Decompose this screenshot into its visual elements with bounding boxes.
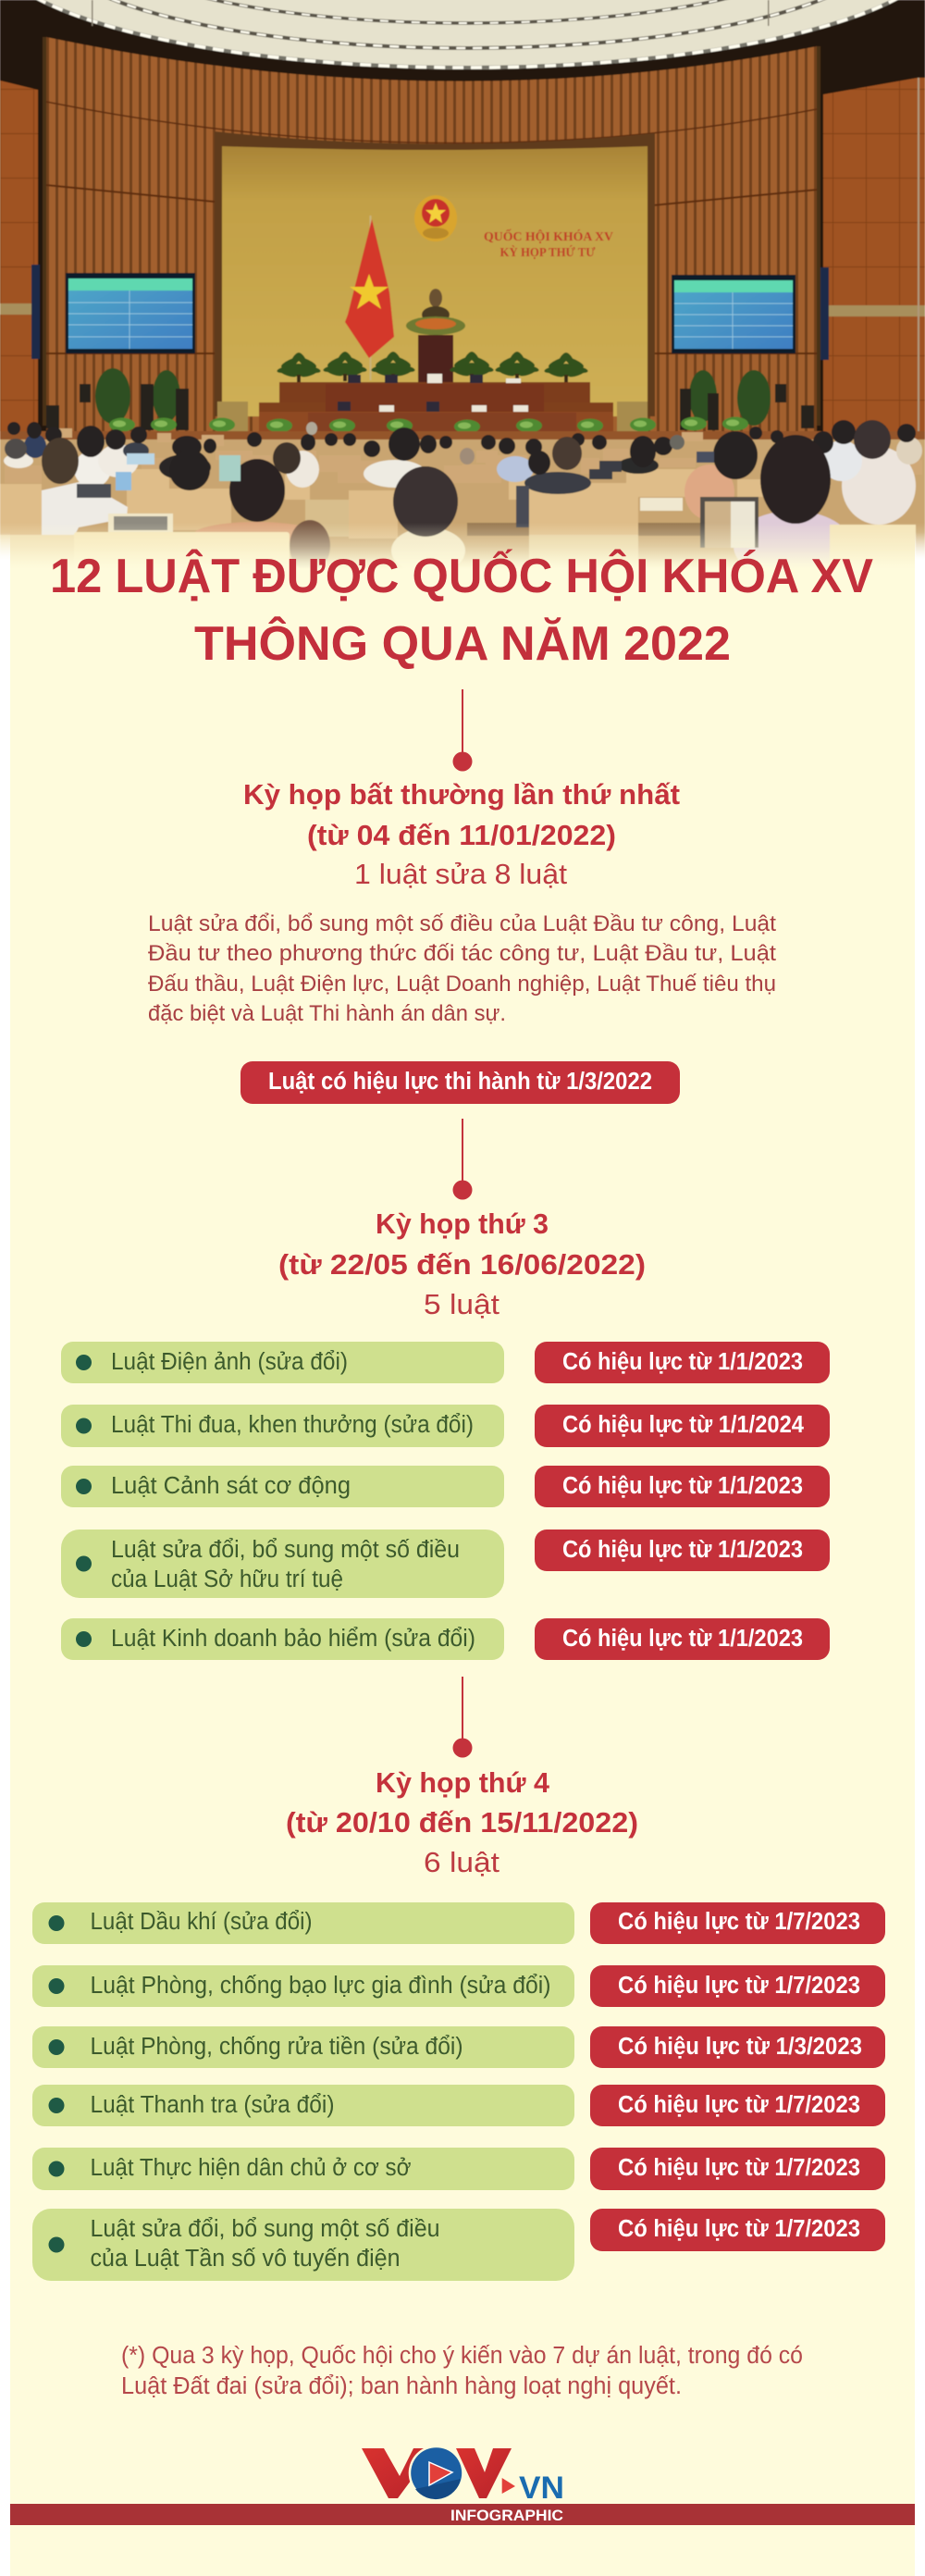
timeline connector 1: [453, 689, 472, 772]
effective date button: [240, 1061, 680, 1104]
row: Luật Cảnh sát cơ động: Có hiệu lực từ 1/1/2023: [562, 1473, 803, 1499]
row: Luật Kinh doanh bảo hiểm: Có hiệu lực từ 1/1/2023: [562, 1626, 803, 1652]
effective date button: Luật có hiệu lực thi hành từ 1/3/2022: [268, 1069, 652, 1095]
law count 2: 5 luật: [424, 1288, 500, 1320]
footnote: Luật Đất đai (sửa đổi); ban hành hàng loạt nghị quyết.: [121, 2373, 682, 2399]
row: Luật Tần số vô tuyến điện: [32, 2209, 885, 2281]
row: Luật Dầu khí: Có hiệu lực từ 1/7/2023: [618, 1909, 860, 1935]
section: extraordinary session: [148, 778, 776, 1104]
footnote: [121, 2343, 803, 2399]
section heading 2: (từ 22/05 đến 16/06/2022): [278, 1248, 646, 1281]
law count 1: 1 luật sửa 8 luật: [354, 858, 567, 890]
flag: [345, 216, 394, 380]
row: Luật Dầu khí: Luật Dầu khí (sửa đổi): [91, 1909, 313, 1935]
row: Luật Cảnh sát cơ động: Luật Cảnh sát cơ động: [111, 1473, 351, 1499]
section heading 3: Kỳ họp thứ 4: [376, 1766, 550, 1799]
law count 3: 6 luật: [424, 1846, 500, 1878]
row: Luật Kinh doanh bảo hiểm: Luật Kinh doanh bảo hiểm (sửa đổi): [111, 1626, 475, 1652]
row: Luật Thanh tra: Luật Thanh tra (sửa đổi): [91, 2092, 335, 2118]
section heading 3: [286, 1766, 638, 1839]
audience people: [4, 420, 922, 581]
row: Luật Sở hữu trí tuệ: của Luật Sở hữu trí tuệ: [111, 1567, 343, 1592]
national emblem: [414, 195, 457, 242]
row: Luật Thi đua, khen thưởng: Luật Thi đua, khen thưởng (sửa đổi): [111, 1412, 474, 1438]
photo: National Assembly hall: [0, 0, 925, 581]
row: Luật Kinh doanh bảo hiểm: [61, 1618, 830, 1660]
row: Luật Dầu khí: [32, 1902, 885, 1944]
laptops and tablets: [77, 452, 758, 548]
cameras and staff: [46, 384, 814, 430]
row: Luật Thi đua, khen thưởng: Có hiệu lực từ 1/1/2024: [562, 1412, 805, 1438]
ceiling: [0, 0, 925, 69]
row: Luật Tần số vô tuyến điện: Luật sửa đổi, bổ sung một số điều: [91, 2216, 440, 2242]
row: Luật Sở hữu trí tuệ: Có hiệu lực từ 1/1/2023: [562, 1537, 803, 1563]
title: 12 LUẬT ĐƯỢC QUỐC HỘI KHÓA XV: [50, 549, 873, 603]
row: Luật Tần số vô tuyến điện: Có hiệu lực từ 1/7/2023: [618, 2216, 860, 2242]
hall wall caption: QUỐC HỘI KHÓA XV: [484, 228, 613, 244]
title: [50, 549, 873, 671]
left voting screen: [31, 265, 195, 359]
logo: VOV.VN: [362, 2446, 564, 2506]
section heading 2: [278, 1208, 646, 1281]
section: third session: [61, 1208, 830, 1660]
description paragraph: Luật sửa đổi, bổ sung một số điều của Luật Đầu tư công, Luật: [148, 911, 776, 936]
foreground cream seat backs: [0, 524, 916, 563]
row: Luật Phòng, chống bạo lực gia đình: [32, 1965, 885, 2007]
side walls: [0, 78, 925, 435]
section heading 1: (từ 04 đến 11/01/2022): [307, 819, 616, 851]
audience floor and desks: [0, 428, 925, 578]
row: Luật Phòng, chống rửa tiền: Có hiệu lực từ 1/3/2023: [618, 2034, 862, 2060]
timeline connector 3: [453, 1677, 472, 1758]
row: Luật Điện ảnh: Luật Điện ảnh (sửa đổi): [111, 1349, 348, 1375]
wood back wall: [43, 37, 820, 435]
row: Luật Điện ảnh: Có hiệu lực từ 1/1/2023: [562, 1349, 803, 1375]
row: Luật Điện ảnh: [61, 1342, 830, 1383]
row: Luật Thực hiện dân chủ ở cơ sở: [32, 2148, 885, 2190]
description paragraph: Đấu thầu, Luật Điện lực, Luật Doanh nghiệp, Luật Thuế tiêu thụ: [148, 972, 776, 997]
title: THÔNG QUA NĂM 2022: [194, 616, 731, 671]
gold recess wall: [215, 131, 655, 416]
logo: VOV.VN: VN: [519, 2471, 564, 2506]
bust, flowers and lectern: [406, 289, 465, 383]
hall wall caption: [484, 228, 613, 260]
footnote: (*) Qua 3 kỳ họp, Quốc hội cho ý kiến vào 7 dự án luật, trong đó có: [121, 2343, 803, 2369]
low plants: [109, 416, 748, 433]
description paragraph: [148, 911, 776, 1026]
section heading 3: (từ 20/10 đến 15/11/2022): [286, 1806, 638, 1839]
row: Luật Cảnh sát cơ động: [61, 1466, 830, 1507]
fade to cream: [0, 523, 925, 569]
row: Luật Sở hữu trí tuệ: [61, 1530, 830, 1598]
dais: [217, 374, 648, 435]
section heading 1: Kỳ họp bất thường lần thứ nhất: [243, 778, 680, 811]
row: Luật Thi đua, khen thưởng: [61, 1405, 830, 1447]
row: Luật Phòng, chống rửa tiền: [32, 2026, 885, 2068]
row: Luật Phòng, chống rửa tiền: Luật Phòng, chống rửa tiền (sửa đổi): [91, 2034, 462, 2060]
description paragraph: đặc biệt và Luật Thi hành án dân sự.: [148, 1001, 506, 1026]
row: Luật Thanh tra: [32, 2085, 885, 2126]
row: Luật Phòng, chống bạo lực gia đình: Luật Phòng, chống bạo lực gia đình (sửa đổi): [91, 1973, 551, 1999]
footer band: [10, 2504, 915, 2525]
section heading 1: [243, 778, 680, 851]
heads: [7, 420, 916, 490]
row: Luật Phòng, chống bạo lực gia đình: Có hiệu lực từ 1/7/2023: [618, 1973, 860, 1999]
row: Luật Tần số vô tuyến điện: của Luật Tần số vô tuyến điện: [91, 2246, 400, 2272]
row: Luật Thực hiện dân chủ ở cơ sở: Luật Thực hiện dân chủ ở cơ sở: [91, 2155, 411, 2181]
timeline connector 2: [453, 1119, 472, 1199]
right voting screen: [672, 267, 829, 360]
section: fourth session: [32, 1766, 885, 2281]
plants behind dais: [95, 350, 771, 426]
section heading 2: Kỳ họp thứ 3: [376, 1208, 549, 1240]
hall wall caption: KỲ HỌP THỨ TƯ: [500, 244, 596, 260]
footer band: INFOGRAPHIC: [450, 2507, 563, 2524]
row: Luật Thanh tra: Có hiệu lực từ 1/7/2023: [618, 2092, 860, 2118]
description paragraph: Đầu tư theo phương thức đối tác công tư, Luật Đầu tư, Luật: [148, 941, 776, 966]
row: Luật Sở hữu trí tuệ: Luật sửa đổi, bổ sung một số điều: [111, 1537, 460, 1563]
shirts and bodies: [3, 435, 923, 564]
row: Luật Thực hiện dân chủ ở cơ sở: Có hiệu lực từ 1/7/2023: [618, 2155, 860, 2181]
